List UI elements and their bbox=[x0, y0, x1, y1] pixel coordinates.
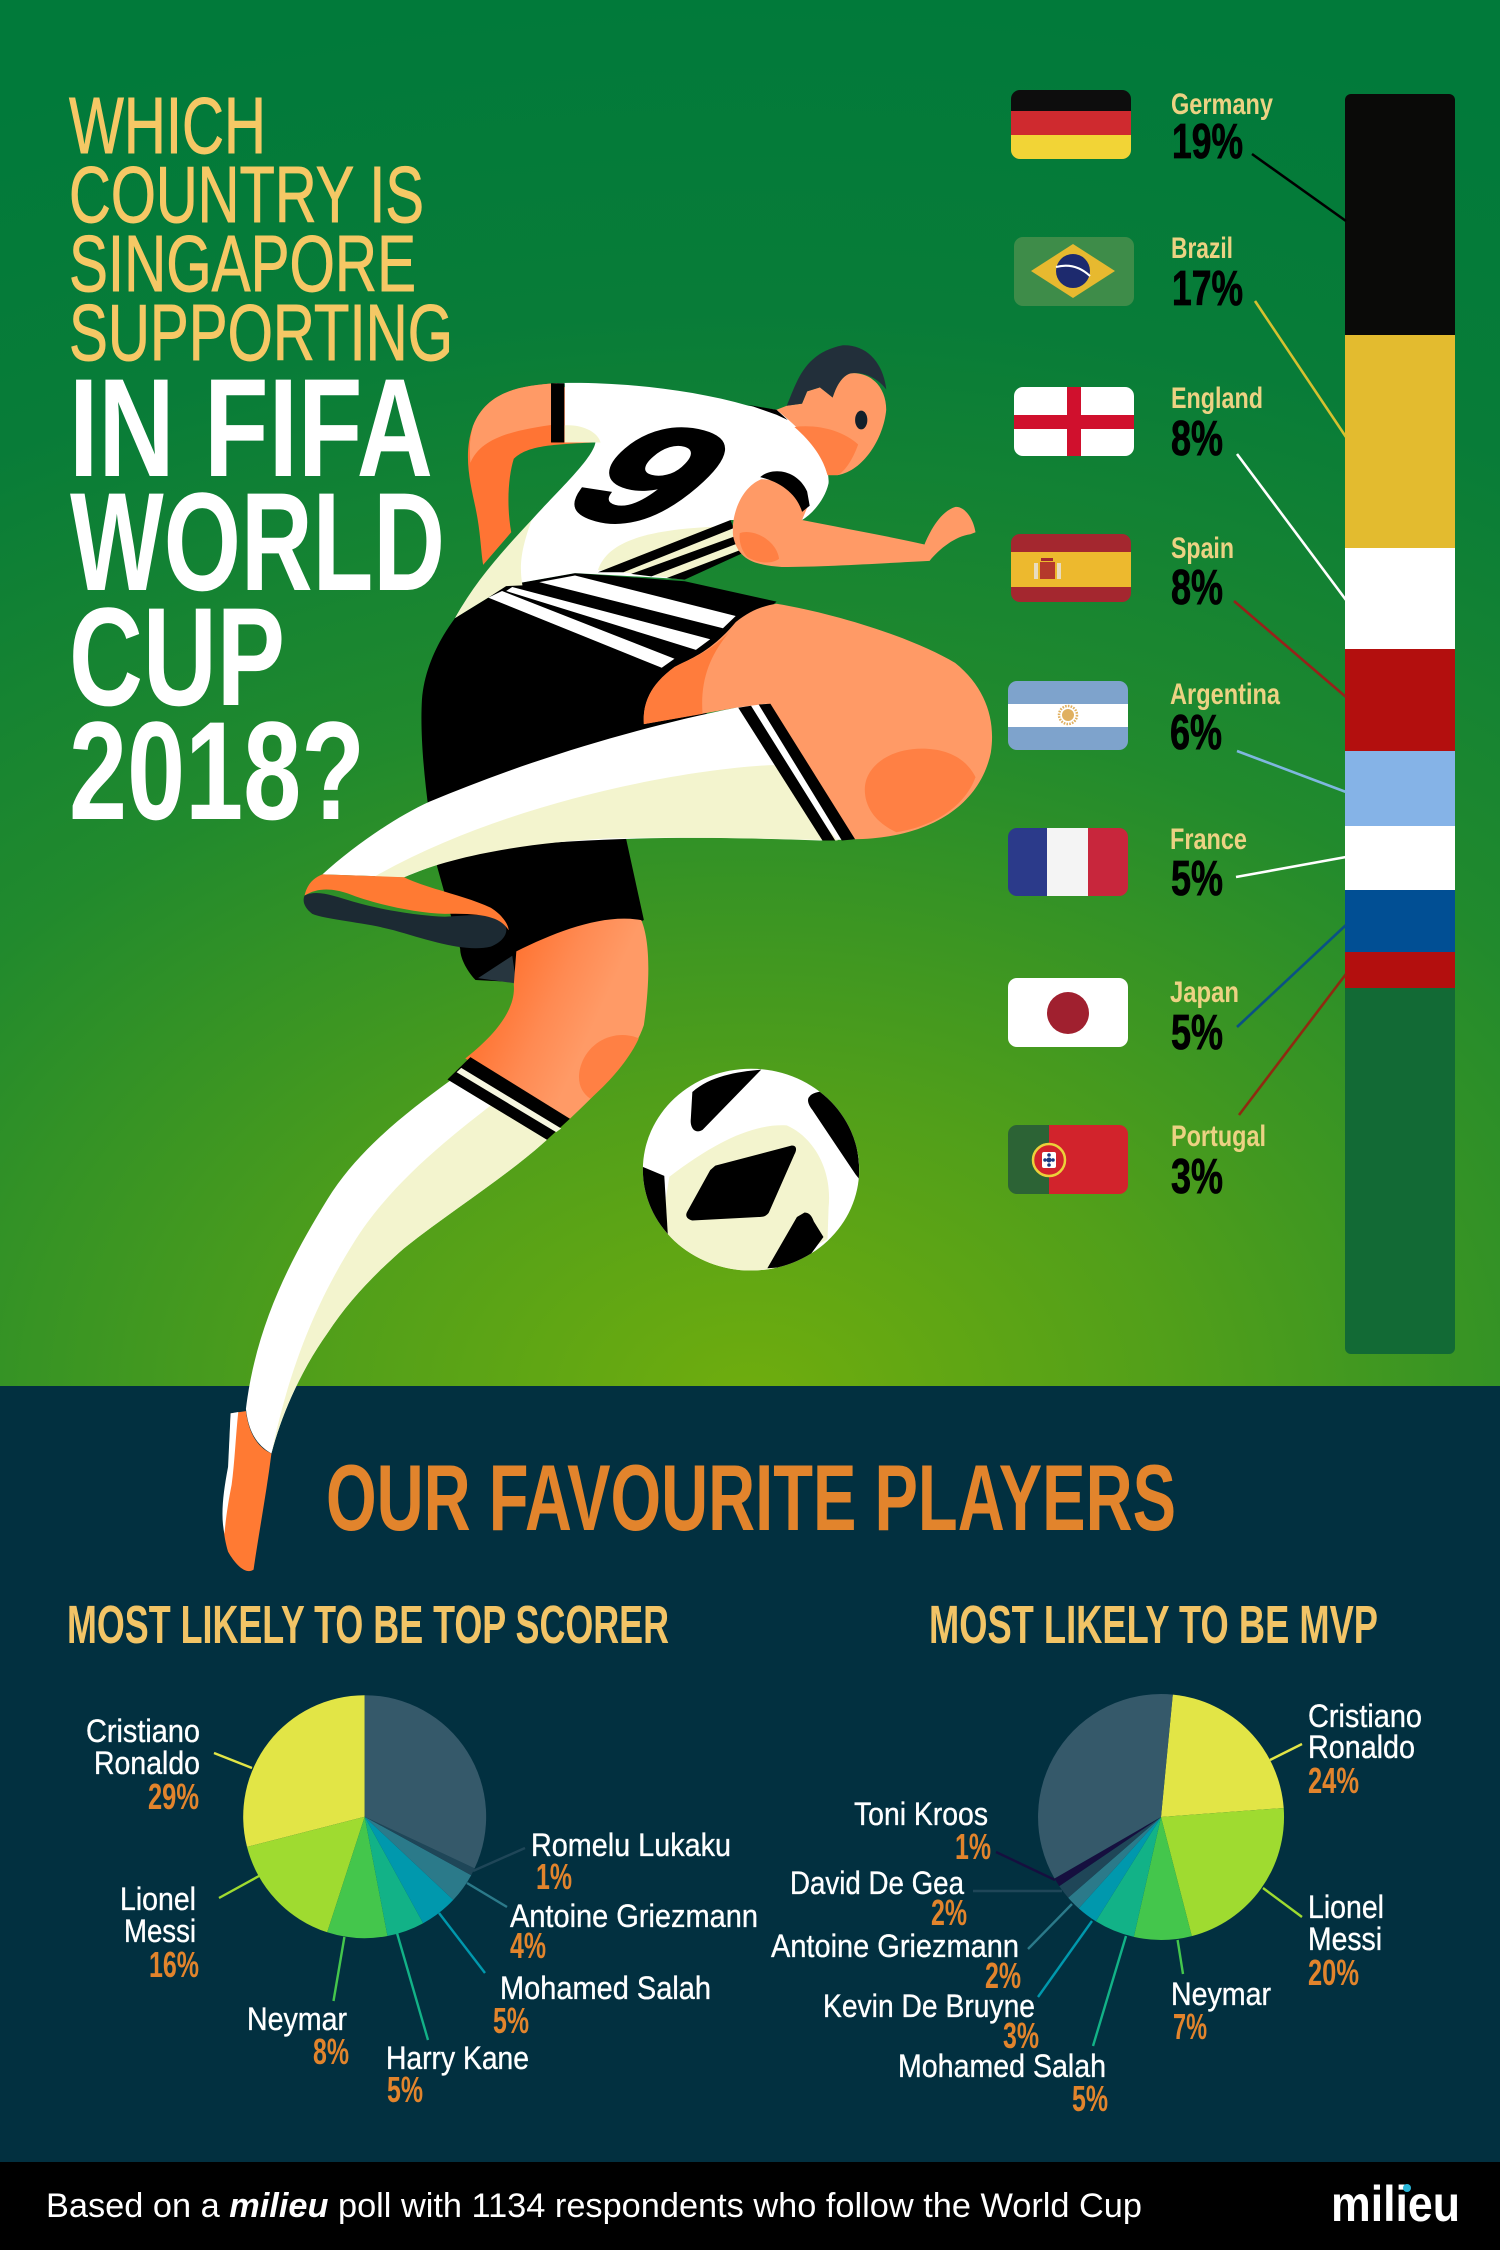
pie chart: MVP bbox=[973, 1694, 1302, 2046]
flag: England bbox=[1014, 387, 1134, 456]
pie labels: MVP: 24% bbox=[1308, 1760, 1359, 1801]
row: Japan: Japan bbox=[1170, 976, 1239, 1009]
pie labels: MVP: Antoine Griezmann bbox=[771, 1928, 1019, 1964]
row: Japan bbox=[1008, 976, 1239, 1060]
row: Germany: 19% bbox=[1172, 115, 1243, 169]
logo: milieu: milieu bbox=[1331, 2176, 1460, 2232]
pie labels: top scorer: Harry Kane bbox=[386, 2040, 529, 2076]
row: Argentina: 6% bbox=[1170, 706, 1222, 760]
row: France: France bbox=[1170, 823, 1247, 856]
pie labels: top scorer: Antoine Griezmann bbox=[510, 1898, 758, 1934]
pie labels: MVP: Toni Kroos bbox=[854, 1796, 988, 1832]
title bbox=[69, 81, 453, 849]
pie chart: top scorer bbox=[214, 1695, 525, 2040]
panel: black footer background bbox=[0, 2162, 1500, 2250]
row: Japan: 5% bbox=[1171, 1006, 1223, 1060]
leader lines: countries to bar bbox=[1234, 154, 1346, 1115]
raised leg bbox=[304, 604, 992, 948]
pie labels: top scorer: Romelu Lukaku bbox=[531, 1827, 731, 1863]
flag: Portugal bbox=[1008, 1125, 1128, 1194]
row: Portugal bbox=[1008, 1124, 1264, 1194]
jersey bbox=[455, 383, 829, 618]
stacked bar: country support bbox=[1345, 94, 1455, 1354]
pie labels: MVP bbox=[771, 1698, 1422, 2119]
icon: football bbox=[639, 1069, 859, 1275]
row: England bbox=[1014, 382, 1263, 466]
heading: top scorer: MOST LIKELY TO BE TOP SCORER bbox=[67, 1595, 669, 1655]
pie labels: MVP: Ronaldo bbox=[1308, 1729, 1415, 1765]
pie labels: MVP: 2% bbox=[931, 1892, 967, 1933]
pie labels: top scorer: 4% bbox=[510, 1925, 546, 1966]
shorts bbox=[421, 573, 777, 982]
row: Spain bbox=[1011, 534, 1233, 605]
title: WORLD bbox=[70, 463, 445, 620]
pie labels: top scorer: Mohamed Salah bbox=[500, 1970, 711, 2006]
pie labels: top scorer: Lionel bbox=[120, 1881, 196, 1917]
pie labels: top scorer: 29% bbox=[148, 1776, 199, 1817]
pie labels: top scorer: 8% bbox=[313, 2031, 349, 2072]
pie labels: top scorer: 1% bbox=[536, 1856, 572, 1897]
row: Germany: Germany bbox=[1171, 88, 1273, 121]
flag: Argentina bbox=[1008, 681, 1128, 750]
shorts stripes bbox=[488, 576, 736, 668]
title: CUP bbox=[69, 578, 285, 735]
pie labels: MVP: Mohamed Salah bbox=[898, 2048, 1106, 2084]
row: Brazil: 17% bbox=[1172, 262, 1243, 316]
pie labels: top scorer: Ronaldo bbox=[94, 1745, 200, 1781]
pie labels: MVP: Kevin De Bruyne bbox=[823, 1988, 1035, 2024]
jersey number: 9 bbox=[522, 393, 782, 560]
pie labels: top scorer: Neymar bbox=[247, 2001, 347, 2037]
pie labels: MVP: David De Gea bbox=[790, 1865, 964, 1901]
back arm bbox=[468, 383, 593, 565]
flag: Brazil bbox=[1014, 237, 1134, 306]
pie labels: MVP: Neymar bbox=[1171, 1976, 1271, 2012]
row: England: 8% bbox=[1171, 412, 1223, 466]
title: 2018? bbox=[69, 692, 365, 849]
pie labels: top scorer: 5% bbox=[493, 2000, 529, 2041]
pie labels: MVP: 5% bbox=[1072, 2078, 1108, 2119]
flag: Spain bbox=[1011, 534, 1131, 602]
row: Argentina: Argentina bbox=[1170, 678, 1280, 711]
row: Brazil bbox=[1014, 232, 1243, 316]
pie labels: MVP: 20% bbox=[1308, 1952, 1359, 1993]
row: England: England bbox=[1171, 382, 1263, 415]
row: Germany bbox=[1011, 90, 1273, 159]
flag: France bbox=[1008, 828, 1128, 896]
pie labels: MVP: 3% bbox=[1003, 2015, 1039, 2056]
row: Portugal: 3% bbox=[1171, 1150, 1223, 1204]
row: Brazil: Brazil bbox=[1171, 232, 1233, 265]
row: Spain: Spain bbox=[1171, 532, 1234, 565]
pie labels: top scorer: Cristiano bbox=[86, 1713, 200, 1749]
row: France bbox=[1008, 828, 1246, 896]
pie labels: top scorer: Messi bbox=[124, 1913, 196, 1949]
pie labels: MVP: 7% bbox=[1173, 2006, 1207, 2047]
pie labels: MVP: Lionel bbox=[1308, 1889, 1384, 1925]
title: COUNTRY IS bbox=[69, 150, 424, 239]
title: IN FIFA bbox=[69, 349, 433, 506]
panel: dark players background bbox=[0, 1386, 1500, 2162]
pie labels: MVP: 2% bbox=[985, 1955, 1021, 1996]
title: SUPPORTING bbox=[69, 288, 453, 377]
title: SINGAPORE bbox=[69, 219, 416, 308]
pie labels: MVP: Cristiano bbox=[1308, 1698, 1422, 1734]
standing leg bbox=[222, 1081, 547, 1571]
panel: green hero background bbox=[0, 0, 1500, 1386]
pie labels: top scorer: 5% bbox=[387, 2069, 423, 2110]
footer note: Based on a milieu poll with 1134 respondents who follow the World Cup bbox=[46, 2187, 1142, 2225]
pie labels: top scorer: 16% bbox=[149, 1944, 199, 1985]
pie labels: MVP: 1% bbox=[955, 1826, 991, 1867]
row: Argentina bbox=[1008, 681, 1280, 750]
title: WHICH bbox=[69, 81, 266, 170]
row: Spain: 8% bbox=[1171, 561, 1223, 615]
row: France: 5% bbox=[1171, 852, 1223, 906]
pie labels: top scorer bbox=[86, 1713, 758, 2110]
front arm and head bbox=[733, 345, 976, 567]
row: Portugal: Portugal bbox=[1171, 1120, 1266, 1153]
pie labels: MVP: Messi bbox=[1308, 1921, 1382, 1957]
flag: Japan bbox=[1008, 978, 1128, 1047]
illustration: football player bbox=[222, 345, 992, 1571]
standing thigh and sock band bbox=[447, 919, 648, 1140]
flag: Germany bbox=[1011, 90, 1131, 159]
